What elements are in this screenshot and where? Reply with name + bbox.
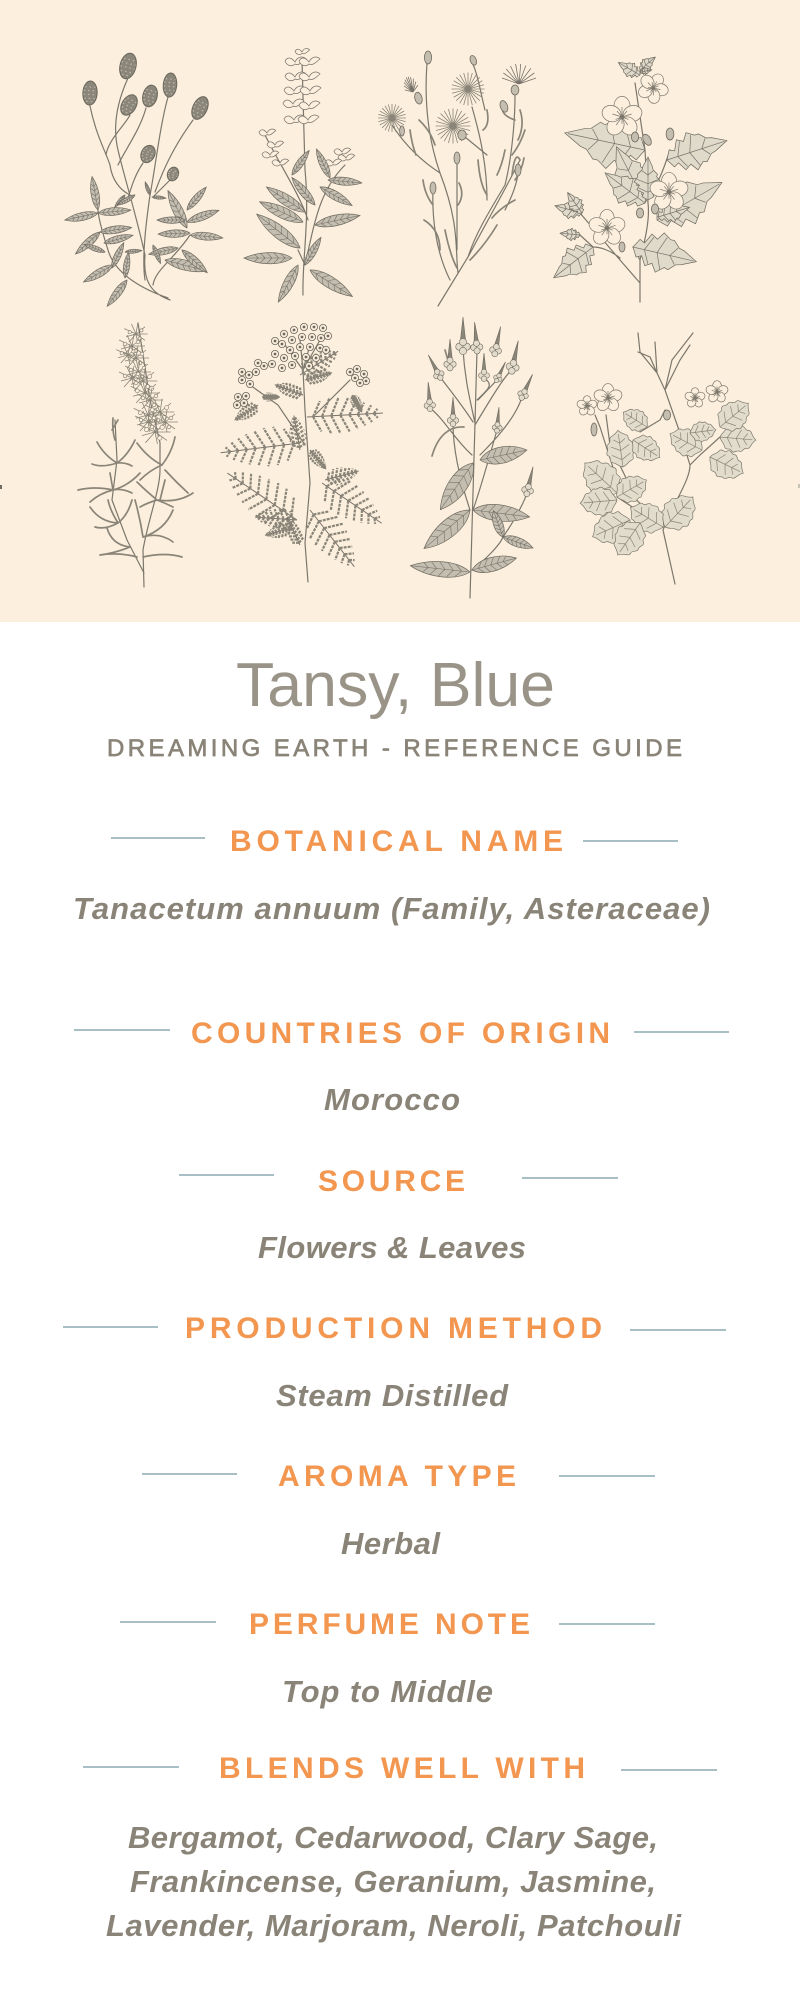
- section: perfume note: Top to Middle: [282, 1674, 493, 1709]
- subtitle: DREAMING EARTH - REFERENCE GUIDE: [107, 735, 682, 762]
- illustration: cornflower plant: [378, 51, 536, 306]
- panel: botanical illustration banner: [0, 0, 800, 622]
- section: production method: [63, 1312, 726, 1413]
- illustration: tansy plant: [216, 323, 391, 582]
- illustration: verbena plant: [410, 317, 539, 598]
- illustration: sage plant: [244, 49, 362, 304]
- section: botanical name: [73, 825, 710, 926]
- section: production method: Steam Distilled: [276, 1378, 509, 1413]
- section: aroma type: [142, 1460, 655, 1561]
- section: blends well with: Lavender, Marjoram, Neroli, Patchouli: [106, 1908, 682, 1943]
- section: source: SOURCE: [318, 1165, 465, 1198]
- section: blends well with: Frankincense, Geranium, Jasmine,: [130, 1864, 656, 1899]
- section: countries of origin: [74, 1017, 729, 1117]
- section: aroma type: Herbal: [341, 1526, 441, 1561]
- section: botanical name: BOTANICAL NAME: [230, 825, 563, 858]
- section: perfume note: [120, 1608, 655, 1709]
- title: Tansy, Blue: [236, 651, 555, 720]
- section: botanical name: Tanacetum annuum (Family, Asteraceae): [73, 891, 710, 926]
- section: blends well with: Bergamot, Cedarwood, Clary Sage,: [128, 1820, 658, 1855]
- illustration: burnet plant: [64, 51, 223, 309]
- section: production method: PRODUCTION METHOD: [185, 1312, 602, 1345]
- illustration: hyssop plant: [78, 323, 193, 587]
- section: source: [179, 1165, 618, 1265]
- section: source: Flowers & Leaves: [258, 1230, 526, 1265]
- section: blends well with: [83, 1752, 717, 1943]
- section: blends well with: BLENDS WELL WITH: [219, 1752, 585, 1785]
- section: perfume note: PERFUME NOTE: [249, 1608, 530, 1641]
- section: countries of origin: Morocco: [324, 1082, 460, 1117]
- section: countries of origin: COUNTRIES OF ORIGIN: [191, 1017, 610, 1050]
- illustration: celandine plant: [573, 333, 758, 584]
- illustration: mallow plant: [544, 52, 733, 302]
- section: aroma type: AROMA TYPE: [278, 1460, 516, 1493]
